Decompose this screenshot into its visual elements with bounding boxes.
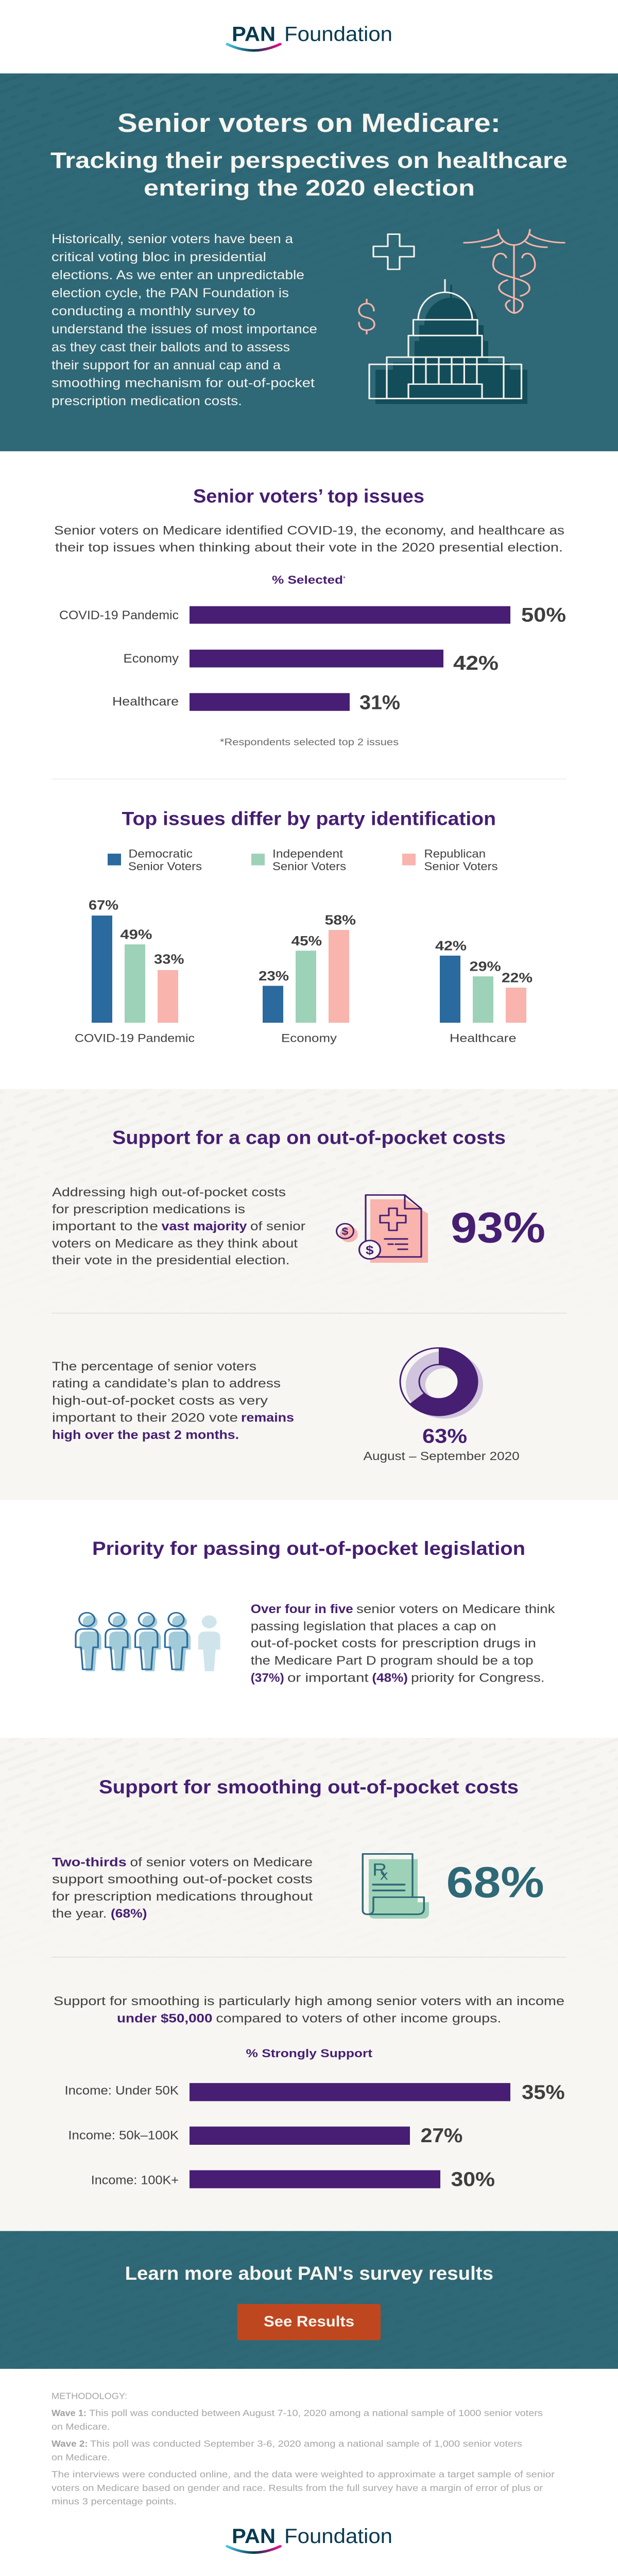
legend item: Republican: Senior Voters <box>424 860 498 872</box>
panel: support for a cap <box>0 1089 618 1500</box>
icon: caduceus <box>464 230 564 313</box>
title: entering the 2020 election <box>144 175 475 200</box>
legend item: Democratic: Senior Voters <box>128 860 202 872</box>
text block: methodology: This poll was conducted between August 7-10, 2020 among a national sample of 1000 senior voters <box>89 2408 543 2418</box>
heading: party identification: Top issues differ by party identification <box>122 808 496 829</box>
bar: Under 50K <box>65 2081 565 2103</box>
heading: support for smoothing: Support for smoothing out-of-pocket costs <box>99 1776 519 1798</box>
stat: 68 percent: 68% <box>447 1858 544 1907</box>
icon: five people, four highlighted <box>76 1613 220 1671</box>
bar: 100K+: 30% <box>451 2168 495 2190</box>
text block: over four in five: Over four in five <box>251 1602 353 1616</box>
heading: learn more: Learn more about PAN's survey results <box>125 2263 493 2284</box>
bar group: COVID-19 Pandemic: COVID-19 Pandemic <box>75 1032 195 1044</box>
bar: 50k-100K: 27% <box>421 2125 462 2147</box>
bar chart: top issues <box>59 604 566 714</box>
text block: top issues intro <box>54 523 564 554</box>
bar: Under 50K: 35% <box>522 2081 565 2103</box>
heading: support for a cap: Support for a cap on out-of-pocket costs <box>112 1127 506 1148</box>
legend item: Democratic: Democratic <box>129 848 193 860</box>
text block: methodology <box>52 2391 555 2506</box>
footnote: *Respondents selected top 2 issues <box>220 737 399 748</box>
bar group: Healthcare: 22% <box>502 970 533 985</box>
text block: two-thirds: Two-thirds <box>52 1855 127 1869</box>
bar: COVID-19 Pandemic: 50% <box>521 604 566 626</box>
text block: over four in five: the Medicare Part D program should be a top <box>251 1653 534 1667</box>
bar: COVID-19 Pandemic <box>59 604 566 626</box>
text block: top issues intro: Senior voters on Medicare identified COVID-19, the economy, and healthcare as <box>54 523 564 537</box>
intro text block: smoothing mechanism for out-of-pocket <box>52 375 315 390</box>
text block: vast majority: vast majority <box>162 1219 247 1233</box>
icon: capitol building <box>369 279 527 404</box>
logo: PAN Foundation bottom <box>227 2525 392 2553</box>
bar group: COVID-19 Pandemic: 33% <box>154 951 184 967</box>
icon: prescription scroll: R <box>372 1860 387 1879</box>
text block: over four in five: or important <box>287 1670 369 1685</box>
bar group: Healthcare: 29% <box>470 958 501 974</box>
text block: vast majority: for prescription medications is <box>52 1202 245 1216</box>
legend <box>108 848 498 872</box>
text block: vast majority: of senior <box>250 1219 305 1233</box>
text block: remains high: important to their 2020 vote <box>52 1410 238 1425</box>
text block: two-thirds: the year. <box>52 1906 107 1921</box>
bar: 50k-100K <box>68 2125 462 2147</box>
text block: methodology: on Medicare. <box>52 2452 110 2462</box>
text block: methodology: on Medicare. <box>52 2421 110 2432</box>
intro text block: as they cast their ballots and to assess <box>52 340 290 354</box>
legend item: Independent <box>251 848 346 872</box>
icon: medical bill with coins <box>337 1195 428 1263</box>
legend item: Republican: Republican <box>424 848 486 860</box>
chart title: strongly support: % Strongly Support <box>246 2047 372 2060</box>
stat: 63 percent: 63% <box>422 1425 467 1447</box>
bar group: Healthcare: Healthcare <box>450 1032 516 1044</box>
text block: over four in five: (37%) <box>251 1670 284 1685</box>
text block: remains high: high over the past 2 months. <box>52 1427 239 1442</box>
bar chart: income <box>65 2081 565 2190</box>
text block: two-thirds: for prescription medications throughout <box>52 1889 313 1903</box>
text block: methodology: The interviews were conducted online, and the data were weighted to approximate a target sample of senior <box>52 2469 555 2479</box>
text block: over four in five: priority for Congress. <box>411 1670 545 1685</box>
intro text block: understand the issues of most importance <box>52 321 317 336</box>
button: see results <box>237 2304 381 2340</box>
chart title: percent selected: % Selected <box>272 573 343 586</box>
intro text block: elections. As we enter an unpredictable <box>52 267 304 282</box>
bar: Economy: 42% <box>453 652 499 674</box>
bar group: Healthcare: 42% <box>435 938 467 953</box>
text block: two-thirds: (68%) <box>111 1906 147 1921</box>
text block: remains high: rating a candidate’s plan to address <box>52 1376 281 1391</box>
text block: income <box>54 1994 564 2025</box>
icon: prescription scroll: x <box>380 1868 388 1883</box>
text block: over four in five: (48%) <box>372 1670 408 1685</box>
text block: two-thirds: of senior voters on Medicare <box>130 1855 313 1869</box>
text block: vast majority: Addressing high out-of-pocket costs <box>52 1185 286 1199</box>
donut caption: August – September 2020 <box>364 1450 520 1463</box>
intro text block <box>52 231 317 408</box>
text block: two-thirds: support smoothing out-of-pocket costs <box>52 1872 313 1886</box>
bar: Healthcare: Healthcare <box>112 695 179 708</box>
text block: methodology: This poll was conducted September 3-6, 2020 among a national sample of 1,000 senior voters <box>90 2438 522 2449</box>
text block: over four in five: passing legislation that places a cap on <box>251 1619 496 1633</box>
text block: vast majority: voters on Medicare as they think about <box>52 1236 298 1250</box>
legend item: Independent: Senior Voters <box>272 860 346 872</box>
text block: methodology: Wave 2: <box>52 2438 88 2449</box>
bar: 100K+ <box>91 2168 495 2190</box>
text block: two-thirds <box>52 1855 313 1921</box>
bar group: Economy: 45% <box>291 933 322 948</box>
text block: vast majority: their vote in the presidential election. <box>52 1253 290 1267</box>
bar: Economy: Economy <box>124 652 179 665</box>
title: Tracking their perspectives on healthcare <box>50 147 568 173</box>
text block: methodology: METHODOLOGY: <box>52 2391 127 2401</box>
heading: priority for passing legislation: Priority for passing out-of-pocket legislation <box>92 1538 525 1559</box>
chart title: percent selected: * <box>343 575 346 582</box>
intro text block: conducting a monthly survey to <box>52 303 255 318</box>
icon: dollar sign <box>359 299 374 334</box>
bar group: COVID-19 Pandemic: 49% <box>120 926 152 942</box>
panel: call to action <box>0 2231 618 2369</box>
bar group: COVID-19 Pandemic <box>75 897 195 1044</box>
bar group: Economy: 23% <box>259 968 289 984</box>
intro text block: critical voting bloc in presidential <box>52 249 266 264</box>
legend item: Independent: Independent <box>272 848 343 860</box>
intro text block: Historically, senior voters have been a <box>52 231 294 246</box>
text block: vast majority <box>52 1185 305 1267</box>
grouped bar chart: party identification <box>75 897 533 1044</box>
bar group: Economy: Economy <box>281 1032 337 1044</box>
text block: methodology: voters on Medicare based on gender and race. Results from the full survey have a margin of error of plus or <box>52 2483 543 2493</box>
bar group: COVID-19 Pandemic: 67% <box>89 897 118 912</box>
text block: vast majority: important to the <box>52 1219 158 1233</box>
logo: PAN Foundation bottom: Foundation <box>284 2525 392 2548</box>
text block: remains high: remains <box>241 1410 294 1425</box>
logo: PAN Foundation top: Foundation <box>284 23 392 46</box>
bar group: Healthcare <box>435 938 533 1044</box>
logo: PAN Foundation bottom: PAN <box>232 2525 276 2548</box>
bar: 100K+: Income: 100K+ <box>91 2174 179 2187</box>
stat: 93 percent: 93% <box>451 1204 545 1252</box>
icon: medical bill with coins: $ <box>366 1243 374 1257</box>
text block: methodology: minus 3 percentage points. <box>52 2496 177 2506</box>
text block: income: Support for smoothing is particularly high among senior voters with an income <box>54 1994 564 2008</box>
logo: PAN Foundation top: PAN <box>232 23 276 46</box>
text block: over four in five <box>251 1602 555 1685</box>
intro text block: election cycle, the PAN Foundation is <box>52 285 289 300</box>
bar: 50k-100K: Income: 50k–100K <box>68 2129 179 2142</box>
icon: medical bill with coins: $ <box>342 1225 348 1238</box>
title: Senior voters on Medicare: <box>117 109 501 138</box>
title <box>50 109 568 200</box>
text block: methodology: Wave 1: <box>52 2408 87 2418</box>
panel: header <box>0 73 618 451</box>
intro text block: their support for an annual cap and a <box>52 358 281 372</box>
bar: Under 50K: Income: Under 50K <box>65 2084 179 2097</box>
text block: income: compared to voters of other income groups. <box>216 2011 501 2025</box>
bar: Healthcare <box>112 691 400 714</box>
text block: over four in five: senior voters on Medicare think <box>356 1602 555 1616</box>
panel: support for smoothing <box>0 1738 618 2231</box>
intro text block: prescription medication costs. <box>52 393 242 408</box>
text block: top issues intro: their top issues when thinking about their vote in the 2020 presential election. <box>55 540 563 554</box>
icon: prescription scroll <box>363 1854 429 1919</box>
donut chart: 63 percent <box>400 1347 483 1418</box>
legend item: Democratic <box>108 848 202 872</box>
text block: remains high: high-out-of-pocket costs as very <box>52 1393 268 1408</box>
bar group: Economy: 58% <box>325 912 356 927</box>
text block: income: under $50,000 <box>117 2011 212 2025</box>
heading: top issues: Senior voters’ top issues <box>193 486 424 507</box>
bar: Healthcare: 31% <box>359 691 400 714</box>
icon: medical cross <box>373 234 414 269</box>
button: see results: See Results <box>264 2313 354 2330</box>
logo: PAN Foundation top <box>227 23 392 50</box>
bar: COVID-19 Pandemic: COVID-19 Pandemic <box>59 608 179 622</box>
text block: remains high <box>52 1359 294 1442</box>
legend item: Republican <box>402 848 498 872</box>
bar: Economy <box>124 650 499 674</box>
text block: remains high: The percentage of senior voters <box>52 1359 256 1374</box>
bar group: Economy <box>259 912 356 1044</box>
text block: over four in five: out-of-pocket costs for prescription drugs in <box>251 1636 536 1650</box>
